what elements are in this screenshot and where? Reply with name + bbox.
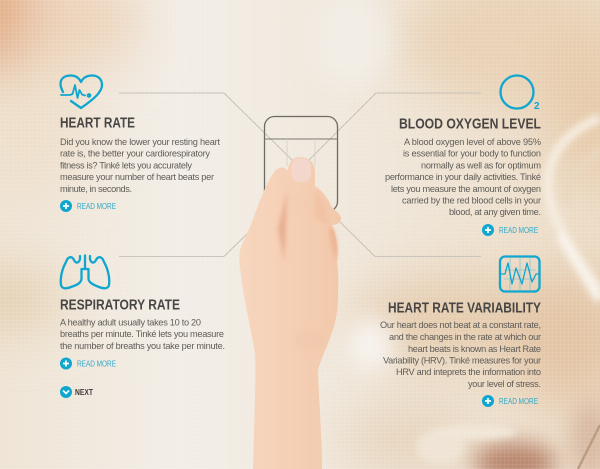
text block: rate is, the better your cardiorespiratory — [60, 149, 210, 159]
read more link: READ MORE — [499, 225, 538, 235]
fingernail — [291, 158, 311, 182]
text block: carried by the red blood cells in your — [402, 196, 541, 206]
panel: heart rate — [60, 76, 220, 212]
text block: and the changes in the rate at which our — [389, 332, 541, 342]
panel: respiratory rate — [60, 256, 225, 398]
read more link — [482, 224, 538, 236]
text block — [385, 137, 541, 217]
text block: the number of breaths you take per minute. — [60, 341, 225, 351]
hand holding device — [239, 157, 341, 469]
next link: NEXT — [75, 387, 94, 397]
read more link: READ MORE — [77, 201, 116, 211]
text block: is essential for your body to function — [403, 149, 541, 159]
text block: normally as well as for optimum — [421, 160, 541, 170]
next link — [60, 386, 94, 398]
read more link — [482, 395, 538, 407]
icon: heart with pulse — [60, 76, 102, 108]
text block: measure your number of heart beats per — [60, 172, 214, 182]
panel: blood oxygen level — [385, 76, 541, 236]
text block: minute, in seconds. — [60, 184, 132, 194]
text block: lets you measure the amount of oxygen — [391, 184, 541, 194]
text block: HRV and inteprets the information into — [396, 367, 541, 377]
text block: A healthy adult usually takes 10 to 20 — [60, 318, 201, 328]
text block: Did you know the lower your resting heart — [60, 137, 220, 147]
text block — [60, 318, 225, 351]
heading: HEART RATE — [60, 114, 135, 132]
icon: O2 — [500, 76, 540, 112]
shadow folds of the fingers — [278, 190, 337, 352]
read more link — [60, 358, 116, 370]
read more link: READ MORE — [499, 396, 538, 406]
text block: fitness is? Tinké lets you accurately — [60, 160, 192, 170]
text block: blood, at any given time. — [449, 207, 541, 217]
text block: your level of stress. — [468, 379, 541, 389]
panel: heart rate variability — [380, 256, 541, 407]
text block: breaths per minute. Tinké lets you measure — [60, 329, 224, 339]
text block — [60, 137, 220, 194]
icon: ECG monitor — [500, 256, 540, 292]
icon: lungs — [61, 256, 109, 288]
read more link — [60, 200, 116, 212]
text block: heart beats is known as Heart Rate — [408, 344, 541, 354]
text block: Variability (HRV). Tinké measures for your — [383, 356, 541, 366]
text block: Our heart does not beat at a constant rate, — [380, 320, 541, 330]
heading: BLOOD OXYGEN LEVEL — [399, 116, 541, 132]
icon: O2: 2 — [534, 101, 540, 112]
heading: HEART RATE VARIABILITY — [388, 300, 541, 316]
read more link: READ MORE — [77, 358, 116, 368]
connector lines — [119, 93, 481, 256]
text block: A blood oxygen level of above 95% — [404, 137, 541, 147]
text block — [380, 320, 541, 389]
device outline — [264, 116, 338, 212]
heading: RESPIRATORY RATE — [60, 296, 180, 314]
text block: performance in your daily activities. Tinké — [385, 172, 541, 182]
